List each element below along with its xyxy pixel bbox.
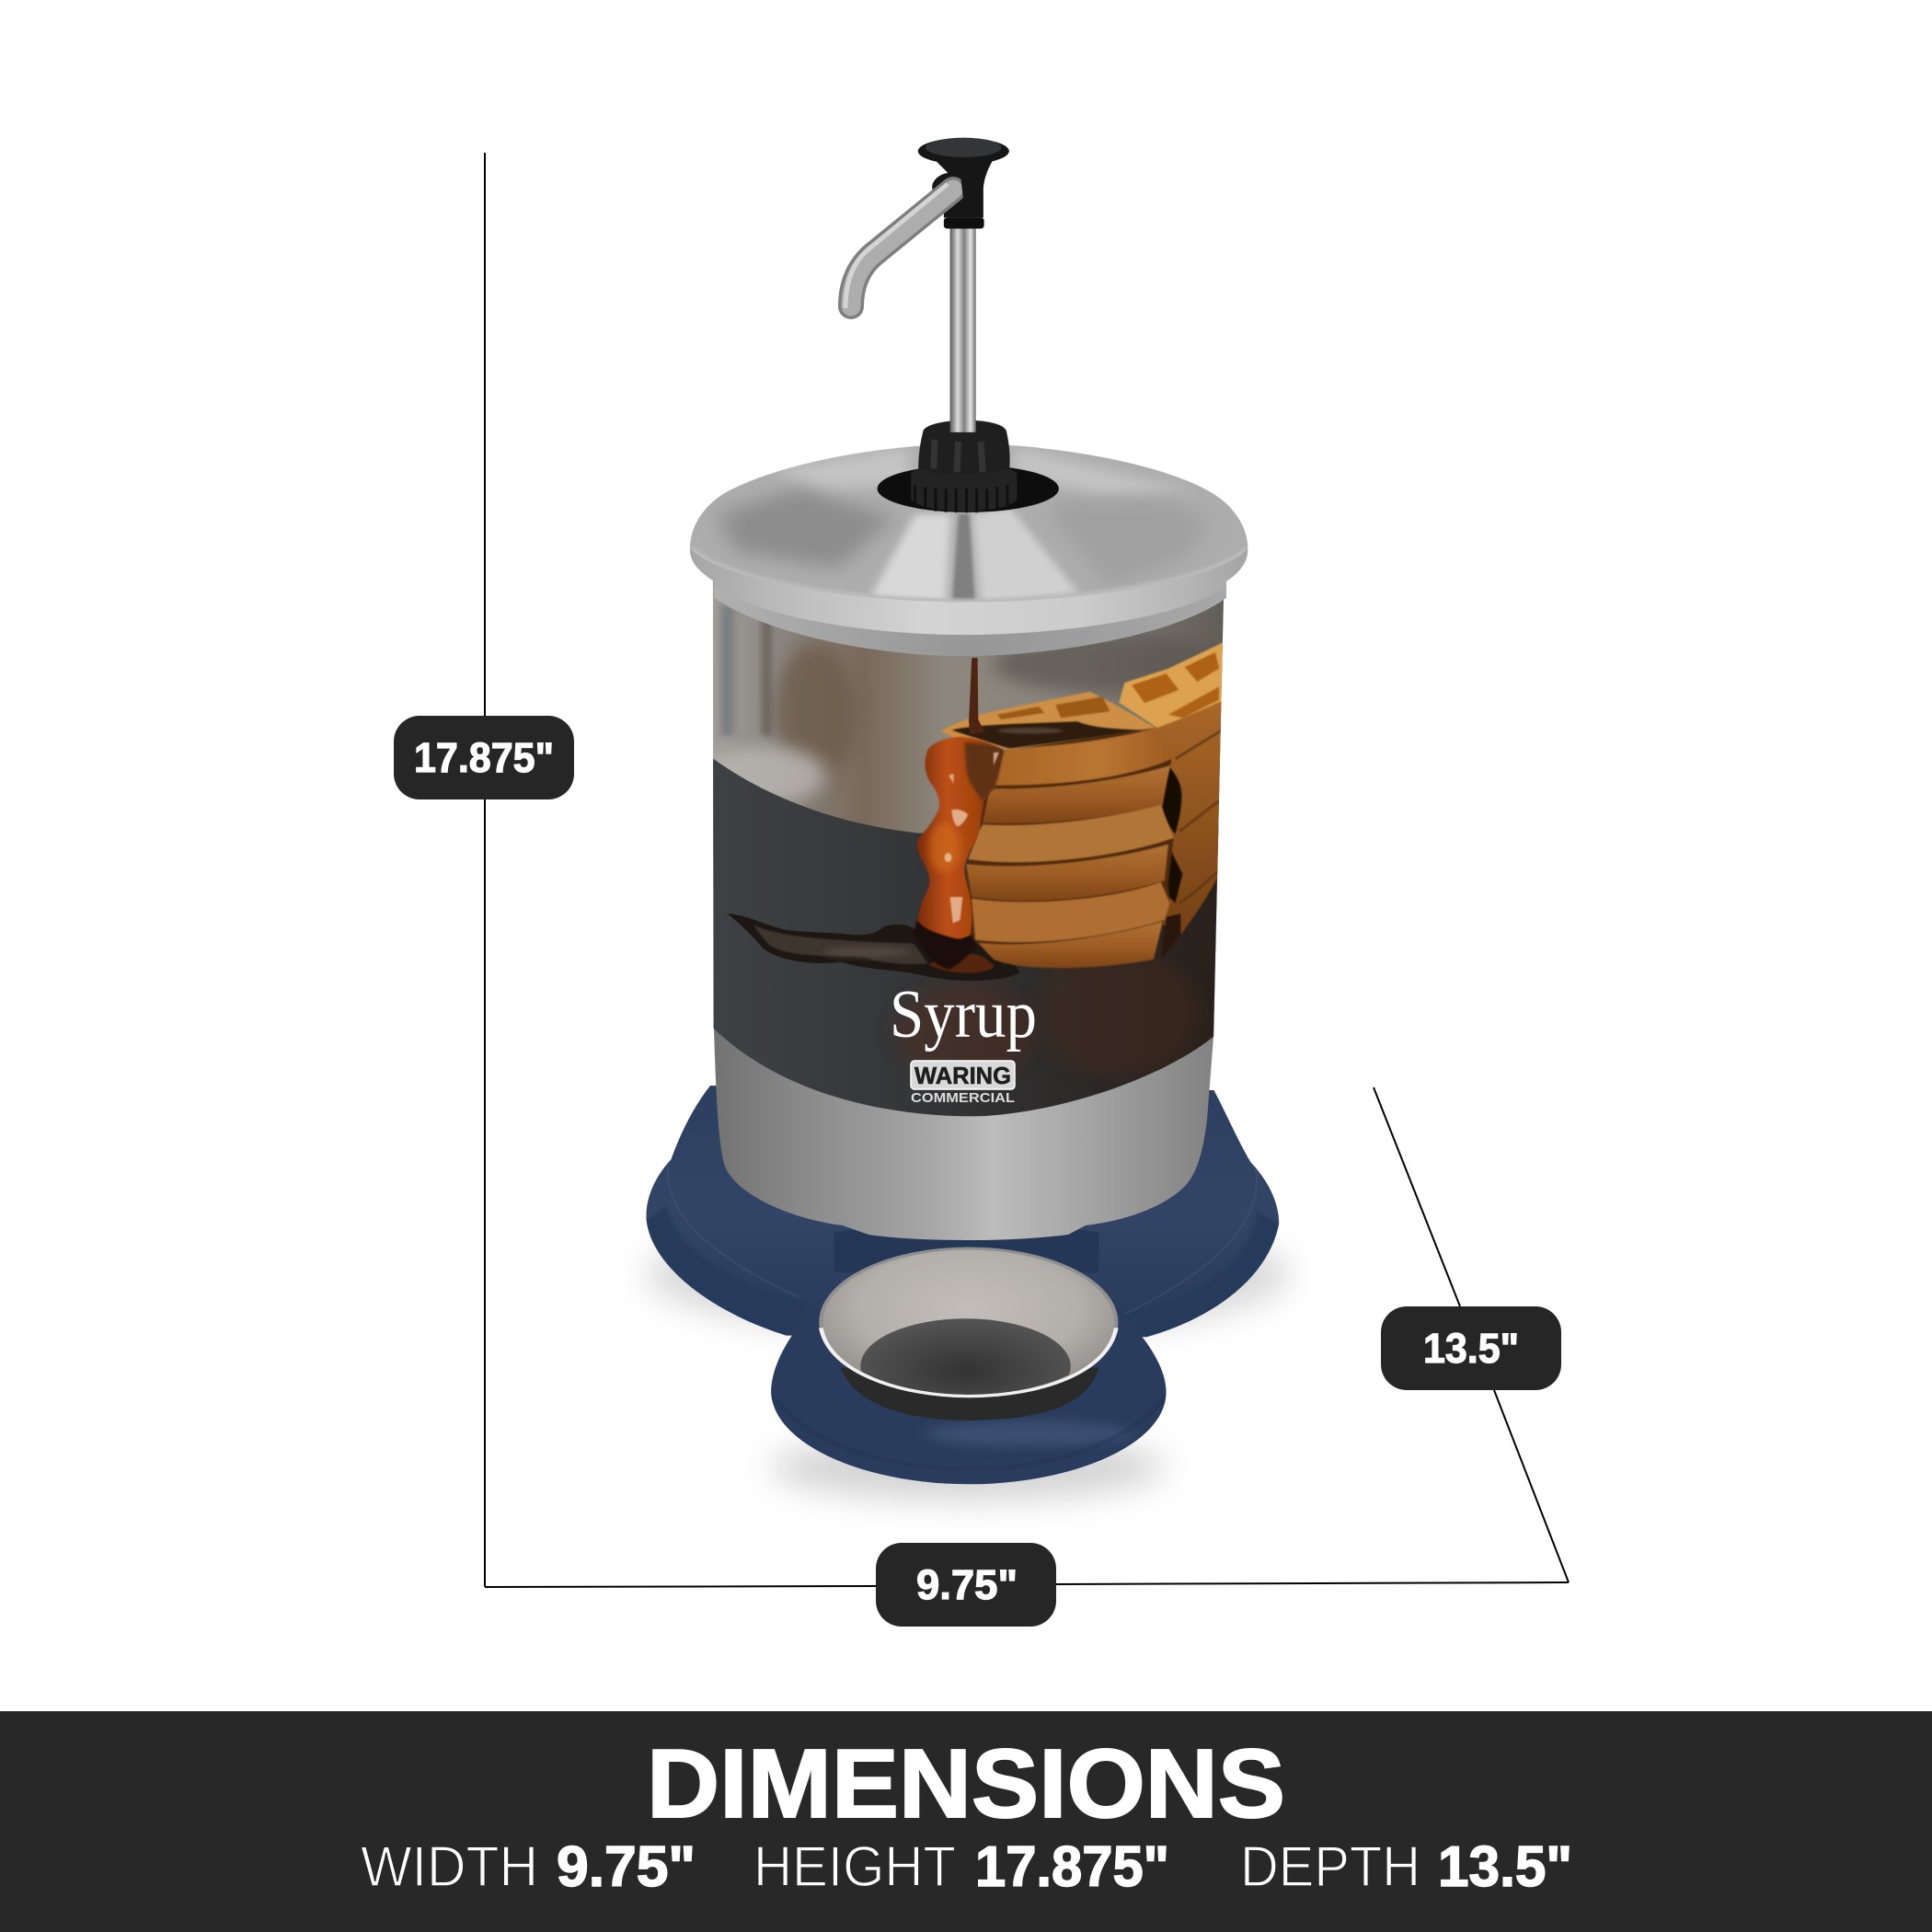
title: DIMENSIONS	[647, 1730, 1285, 1838]
label pill: height: 17.875"	[414, 734, 554, 781]
syrup on top and pouring stream	[951, 658, 1143, 749]
soft ground shadows	[646, 1212, 1290, 1501]
height spec	[753, 1835, 1169, 1899]
pump head	[932, 161, 993, 228]
label pill: height	[394, 716, 574, 799]
label pill: width: 9.75"	[916, 1561, 1018, 1608]
logo: Waring Commercial	[911, 1061, 1015, 1106]
pump opening	[878, 465, 1059, 512]
pump spout tube	[845, 184, 953, 308]
syrup pool on table	[728, 914, 1019, 981]
cup outer wall	[841, 1368, 1098, 1420]
pump knob	[918, 138, 1009, 165]
stainless lid	[690, 420, 1248, 656]
pump head front piece	[950, 179, 983, 218]
logo: Waring Commercial: COMMERCIAL	[911, 1090, 1015, 1106]
front waffle stack	[941, 692, 1174, 968]
depth spec	[1240, 1835, 1572, 1899]
width spec	[361, 1835, 696, 1899]
pump rod	[950, 228, 976, 432]
height spec: 17.875"	[975, 1835, 1169, 1899]
depth spec: 13.5"	[1438, 1835, 1572, 1899]
label pill: depth: 13.5"	[1423, 1325, 1519, 1372]
stainless cylinder body	[713, 552, 1225, 1240]
blue drip tray base	[646, 1086, 1279, 1337]
depth spec: DEPTH	[1240, 1835, 1420, 1899]
dark table surface	[710, 756, 1230, 1137]
product: syrup dispenser	[646, 138, 1290, 1501]
height dimension line	[484, 153, 486, 1587]
logo: Waring Commercial: WARING	[914, 1062, 1011, 1089]
cup rim	[821, 1248, 1116, 1397]
pump threaded cap	[918, 420, 1010, 474]
blurred kitchen backdrop	[712, 581, 1224, 857]
small tray with cup	[771, 1248, 1167, 1484]
width dimension line	[485, 1582, 1569, 1587]
label pill: width	[876, 1543, 1056, 1627]
depth dimension line	[1374, 1087, 1569, 1582]
dome	[690, 443, 1248, 602]
width spec: WIDTH	[361, 1835, 538, 1899]
syrup drip down the waffles	[914, 737, 1003, 970]
label pill: depth	[1381, 1306, 1561, 1390]
product label artwork	[712, 581, 1224, 1117]
footer band	[0, 1711, 1932, 1932]
height spec: HEIGHT	[753, 1835, 956, 1899]
label text: Syrup: Syrup	[890, 977, 1037, 1052]
width spec: 9.75"	[557, 1835, 696, 1899]
cup inner	[822, 1249, 1115, 1395]
pump base ring	[911, 463, 1017, 511]
lid silhouette	[690, 443, 1248, 656]
back waffle stack	[1119, 640, 1226, 960]
lower rim strip	[714, 587, 1226, 656]
